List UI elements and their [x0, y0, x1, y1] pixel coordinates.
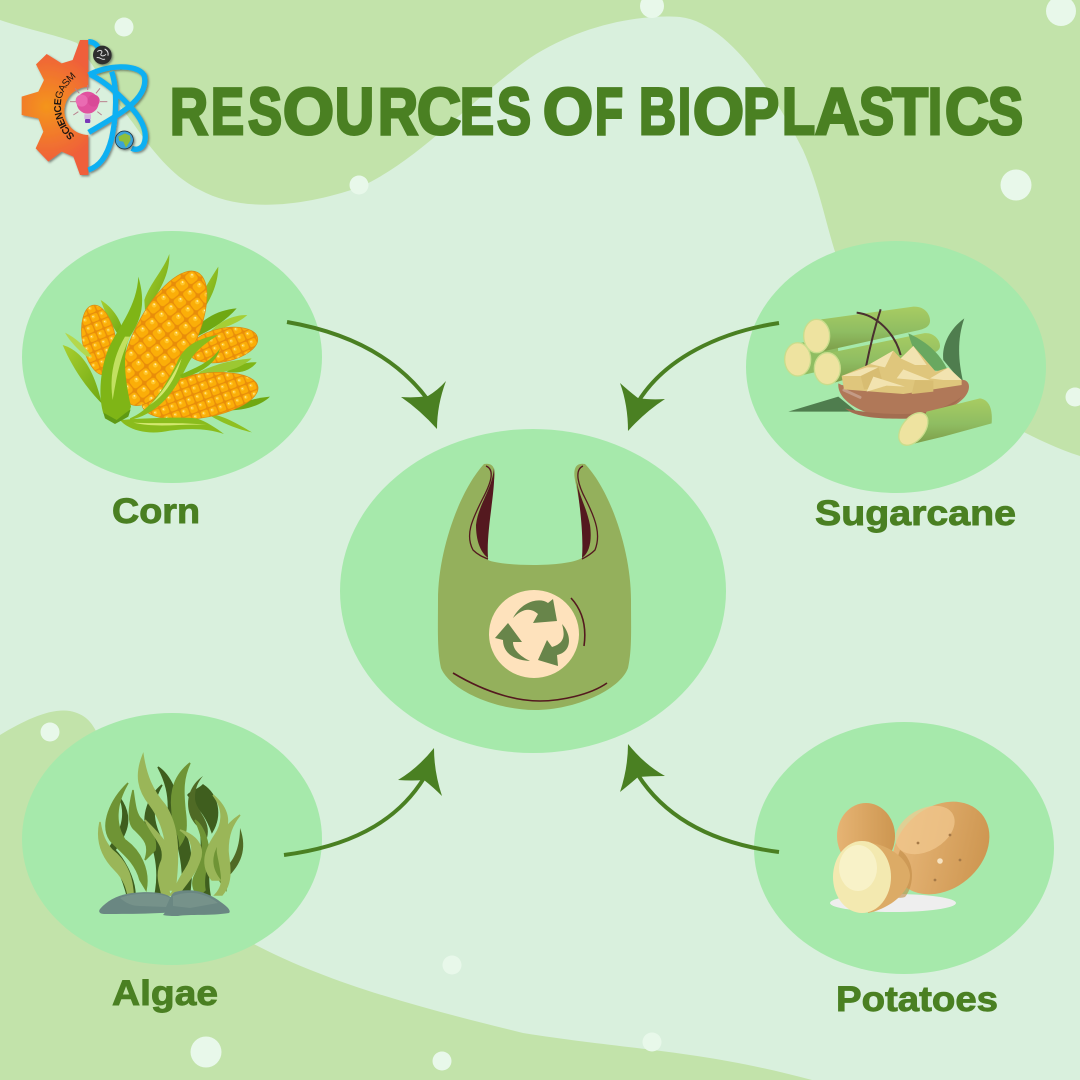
title: O	[543, 74, 593, 148]
title: L	[782, 74, 815, 148]
title: S	[497, 74, 531, 148]
icon: algae	[99, 755, 243, 916]
panel: corn	[22, 231, 322, 531]
corn circle	[22, 231, 322, 483]
sugar cubes	[842, 346, 962, 394]
panel: potatoes	[754, 722, 1054, 1019]
sugarcane label: Sugarcane	[815, 494, 1016, 533]
icon: sugarcane	[785, 307, 992, 451]
title: O	[283, 74, 334, 148]
title: R	[378, 74, 418, 148]
panel: algae	[22, 713, 322, 1013]
arrow: potatoes to bag	[620, 744, 779, 852]
title: F	[595, 74, 623, 148]
logo brain	[70, 85, 107, 123]
title: B	[639, 74, 676, 148]
title: O	[693, 74, 744, 148]
bag handle folds	[476, 468, 591, 558]
recycle arrows	[495, 599, 569, 666]
title: T	[892, 74, 928, 148]
algae circle	[22, 713, 322, 965]
title: E	[460, 74, 494, 148]
title: A	[815, 74, 859, 148]
title: E	[211, 74, 244, 148]
logo gear	[22, 40, 88, 175]
logo wordmark: SCIENCEGASM	[54, 72, 76, 140]
icon: potatoes	[830, 783, 1008, 913]
arrow: algae to bag	[284, 748, 442, 855]
bag seams	[453, 598, 607, 701]
title: R	[170, 74, 208, 148]
title: I	[678, 74, 691, 148]
logo planets	[93, 46, 133, 149]
title: P	[743, 74, 779, 148]
title	[170, 74, 1023, 148]
recycle badge	[489, 590, 579, 678]
title: S	[988, 74, 1023, 148]
title: C	[417, 74, 461, 148]
center circle	[340, 429, 726, 753]
title: S	[859, 74, 894, 148]
panel: sugarcane	[746, 241, 1046, 533]
title: U	[335, 74, 374, 148]
title: I	[928, 74, 942, 148]
arrow: corn to bag	[287, 322, 446, 429]
logo atom	[88, 42, 145, 170]
sugarcane circle	[746, 241, 1046, 493]
algae label: Algae	[112, 974, 218, 1013]
icon: recyclable bag	[438, 464, 631, 710]
icon: corn	[63, 254, 270, 434]
potatoes label: Potatoes	[836, 980, 998, 1019]
title: S	[248, 74, 282, 148]
arrow: sugarcane to bag	[620, 323, 779, 431]
potatoes circle	[754, 722, 1054, 974]
title: C	[945, 74, 989, 148]
panel: bioplastic bag	[340, 429, 726, 753]
logo	[22, 39, 151, 178]
corn label: Corn	[112, 492, 200, 531]
